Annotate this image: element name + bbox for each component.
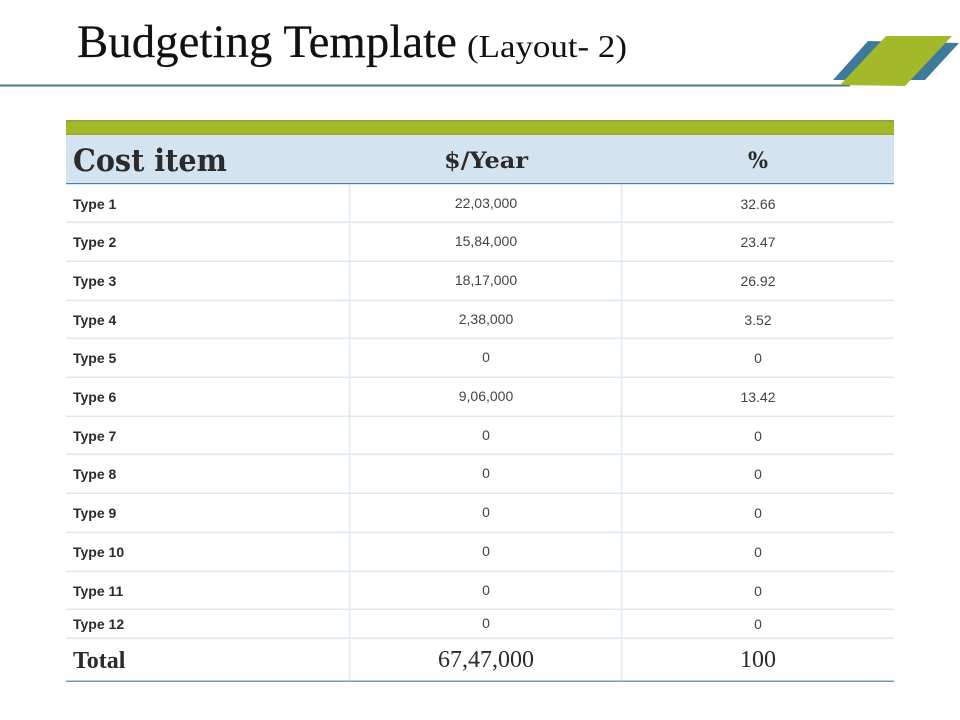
row labels: Type 7 [73,428,117,444]
row labels: Type 12 [73,616,124,632]
percent values: 3.52 [744,312,772,328]
table [66,120,894,682]
table grid lines [66,184,894,681]
row labels: Type 9 [73,505,117,521]
title: (Layout- 2) [467,28,627,64]
$/year values: 0 [482,427,490,443]
title: Budgeting Template [77,16,457,68]
table bottom rule [66,680,894,682]
$/year values: 0 [482,615,490,631]
row labels: Type 11 [73,583,124,599]
percent values: 0 [754,616,762,632]
percent values: 0 [754,350,762,366]
$/year values: 9,06,000 [459,388,513,404]
$/year values: 0 [482,582,490,598]
percent values: 0 [754,428,762,444]
percent values: 0 [754,466,762,482]
$/year values: 0 [482,349,490,365]
percent values: 0 [754,583,762,599]
table accent bar [66,120,894,135]
total row [73,647,776,674]
row labels: Type 3 [73,273,117,289]
row labels: Type 1 [73,196,117,212]
total row: 67,47,000 [438,647,534,673]
header rule [0,84,850,86]
$/year values [455,195,517,631]
percent values: 23.47 [740,234,776,250]
title [77,16,627,68]
percent values: 0 [754,505,762,521]
percent values [740,196,776,632]
row labels: Type 10 [73,544,124,560]
percent values: 26.92 [740,273,776,289]
percent values: 0 [754,544,762,560]
row labels: Type 8 [73,466,117,482]
row labels [73,196,124,632]
$/year values: 18,17,000 [455,272,517,288]
$/year values: 2,38,000 [459,311,513,327]
$/year values: 15,84,000 [455,233,517,249]
table header row: $/Year [444,148,528,174]
row labels: Type 2 [73,234,117,250]
table header row [66,135,894,184]
total row: 100 [740,647,776,673]
$/year values: 0 [482,543,490,559]
percent values: 13.42 [740,389,776,405]
table header row: Cost item [73,143,227,179]
row labels: Type 6 [73,389,117,405]
row labels: Type 4 [73,312,117,328]
total row: Total [73,648,126,674]
$/year values: 22,03,000 [455,195,517,211]
row labels: Type 5 [73,350,117,366]
icon: parallelogram logo [833,36,959,86]
percent values: 32.66 [740,196,776,212]
$/year values: 0 [482,465,490,481]
table header row: % [748,148,768,174]
$/year values: 0 [482,504,490,520]
